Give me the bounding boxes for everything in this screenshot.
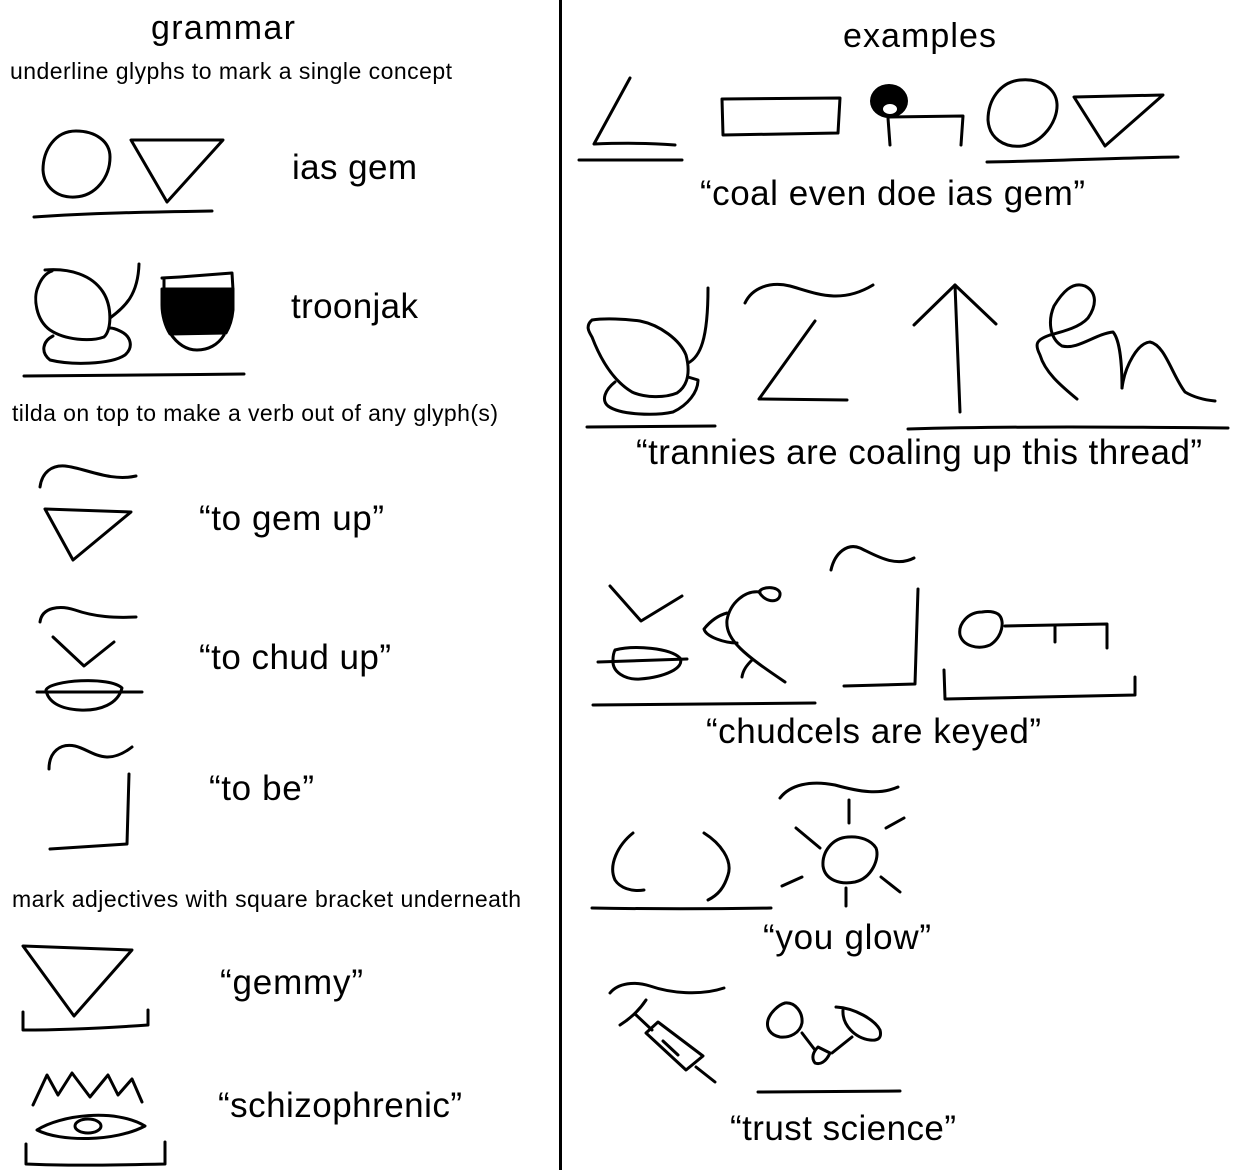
sentence: you glow: “you glow” — [763, 918, 931, 957]
sentence glyphs: trust science — [610, 983, 900, 1092]
panel: examples — [579, 17, 1228, 1148]
label: to gem up: “to gem up” — [199, 499, 384, 538]
glyph: troonjak — [24, 264, 244, 376]
sentence: chudcels are keyed: “chudcels are keyed” — [706, 712, 1041, 751]
panel: grammar — [10, 9, 521, 1165]
glyph: to chud up — [37, 608, 142, 710]
sentence glyphs: chudcels are keyed — [593, 547, 1135, 705]
glyph: to be — [49, 745, 132, 849]
glyph: schizophrenic — [26, 1073, 165, 1165]
glyph: to gem up — [40, 466, 136, 560]
sentence: coal even doe ias gem: “coal even doe ias gem” — [700, 174, 1085, 213]
label: to chud up: “to chud up” — [199, 638, 391, 677]
sentence glyphs: coal even doe ias gem — [579, 78, 1178, 162]
label: to be: “to be” — [209, 769, 314, 808]
sentence glyphs: you glow — [592, 783, 904, 909]
text: tilda rule: tilda on top to make a verb out of any glyph(s) — [12, 400, 498, 426]
sentence glyphs: trannies are coaling up this thread — [587, 284, 1228, 429]
glyph: gemmy — [23, 946, 148, 1030]
heading: grammar: grammar — [151, 9, 295, 47]
heading: examples: examples — [843, 17, 996, 55]
label: troonjak: troonjak — [291, 287, 418, 326]
glyph: ias gem — [34, 131, 223, 217]
text: underline rule: underline glyphs to mark a single concept — [10, 58, 453, 84]
sentence: trust science: “trust science” — [730, 1109, 956, 1148]
text: adjective rule: mark adjectives with square bracket underneath — [12, 886, 521, 912]
label: schizophrenic: “schizophrenic” — [218, 1086, 462, 1125]
sentence: trannies are coaling up this thread: “trannies are coaling up this thread” — [636, 433, 1202, 472]
label: ias gem: ias gem — [292, 148, 417, 187]
label: gemmy: “gemmy” — [220, 963, 363, 1002]
